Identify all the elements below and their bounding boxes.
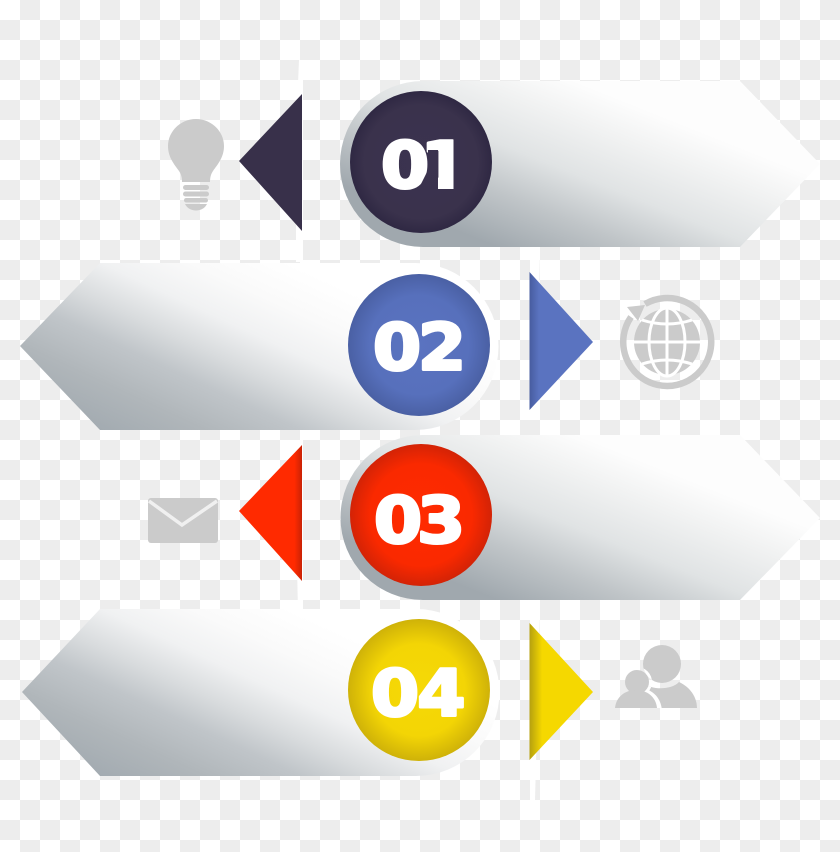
arrow 04: yellow triangle pointing right [530,623,593,760]
banner 03 [340,435,820,600]
number badge 03 [350,444,492,586]
number badge 01 [350,91,492,233]
number badge 01: 01 [381,128,469,203]
arrow 02: blue triangle pointing right [530,272,593,410]
banner 04 [22,609,499,776]
banner 01 [340,81,820,247]
icon: envelope [148,498,218,543]
banner shape 04 [22,609,499,776]
number badge 02: 02 [373,310,466,385]
icon: globe with circular arrow [623,298,711,386]
icon: two people [612,645,697,711]
icon: light bulb [168,119,224,210]
number badge 02 [348,274,490,416]
number badge 04 [348,619,490,761]
arrow 01: dark triangle pointing left [239,94,302,231]
banner shape 01 [340,81,820,247]
banner shape 03 [340,435,820,600]
banner shape 02 [20,263,498,430]
arrow 03: red triangle pointing left [239,445,302,581]
banner 02 [20,263,498,430]
number badge 03: 03 [374,483,465,558]
number badge 04: 04 [371,656,466,731]
